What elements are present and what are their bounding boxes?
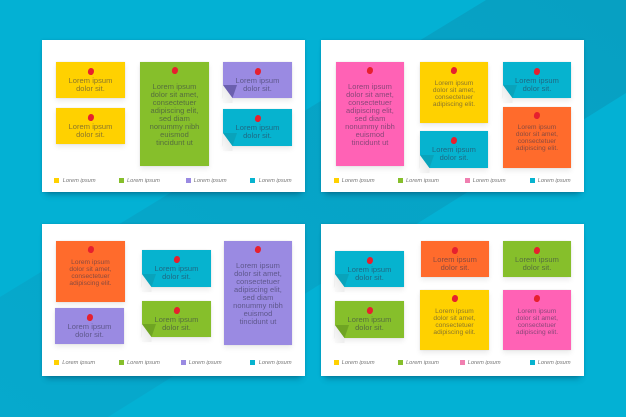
note: yellow lower: dolor sit. [76, 130, 105, 139]
note: orange [421, 241, 489, 277]
panel: top right board [321, 40, 584, 192]
note: cyan folded: dolor sit. [243, 131, 272, 140]
legend: Lorem ipsum [259, 178, 292, 184]
note: purple folded: dolor sit. [243, 84, 272, 93]
note: purple tall: adipiscing elit, [234, 285, 282, 294]
legend: Lorem ipsum [342, 360, 375, 366]
legend: Lorem ipsum [62, 360, 95, 366]
note: yellow [420, 62, 488, 123]
note: pink tall: dolor sit amet, [346, 90, 394, 99]
note: cyan folded upper: Lorem ipsum [515, 76, 559, 85]
note: green [503, 241, 571, 277]
note: green folded [335, 301, 404, 338]
note: yellow: consectetuer [435, 94, 473, 101]
note: purple folded [223, 62, 292, 98]
note: orange: Lorem ipsum [518, 124, 556, 131]
note: purple: Lorem ipsum [68, 322, 111, 331]
note: cyan folded: dolor sit. [355, 273, 384, 282]
note: cyan folded: Lorem ipsum [236, 123, 279, 132]
note: pink tall: Lorem ipsum [348, 82, 392, 91]
note: green tall [140, 62, 209, 166]
note: purple tall: dolor sit amet, [234, 269, 282, 278]
note: green tall: nonummy nibh [150, 122, 199, 131]
note: yellow: dolor sit amet, [433, 315, 476, 322]
note: orange: consectetuer [71, 273, 110, 280]
note: green tall: Lorem ipsum [153, 82, 196, 91]
note: purple: dolor sit. [75, 330, 104, 339]
panel: top left board [42, 40, 305, 192]
legend: Lorem ipsum [406, 360, 439, 366]
note: cyan folded lower [420, 131, 488, 168]
note: yellow: dolor sit amet, [433, 87, 475, 94]
legend: Lorem ipsum [127, 178, 160, 184]
note: orange: consectetuer [518, 138, 556, 145]
legend: Lorem ipsum [189, 360, 222, 366]
note: pink tall: tincidunt ut [352, 138, 388, 147]
note: green tall: dolor sit amet, [151, 90, 198, 99]
note: green: Lorem ipsum [515, 255, 559, 264]
note: yellow: Lorem ipsum [69, 76, 112, 85]
note: purple tall: consectetuer [236, 277, 280, 286]
legend: Lorem ipsum [473, 178, 506, 184]
note: green folded: Lorem ipsum [348, 315, 391, 324]
note: yellow: Lorem ipsum [435, 308, 474, 315]
note: yellow lower [56, 108, 125, 144]
note: yellow lower: Lorem ipsum [69, 122, 112, 131]
legend: Lorem ipsum [538, 360, 571, 366]
panel: bottom right board [321, 224, 584, 376]
note: green tall: consectetuer [153, 98, 196, 107]
legend [54, 360, 292, 366]
note: green folded: dolor sit. [355, 323, 384, 332]
note: pink: dolor sit amet, [516, 315, 558, 322]
note: green folded: dolor sit. [162, 323, 191, 332]
note: purple tall: Lorem ipsum [236, 261, 280, 270]
note: orange [503, 107, 571, 168]
note: pink [503, 290, 571, 350]
note: pink tall: nonummy nibh [345, 122, 395, 131]
note: green tall: tincidunt ut [156, 138, 193, 147]
note: cyan folded: Lorem ipsum [155, 264, 198, 273]
legend [334, 360, 571, 366]
note: yellow [420, 290, 489, 350]
note: yellow: dolor sit. [76, 84, 105, 93]
note: cyan folded upper: dolor sit. [523, 84, 551, 93]
note: pink tall: adipiscing elit, [346, 106, 394, 115]
note: purple tall: euismod [244, 309, 272, 318]
legend: Lorem ipsum [259, 360, 292, 366]
note: orange [56, 241, 125, 302]
note: cyan folded lower: dolor sit. [440, 153, 468, 162]
note: green tall: euismod [160, 130, 189, 139]
note: purple [55, 308, 124, 344]
note: orange: Lorem ipsum [433, 255, 477, 264]
note: pink tall: sed diam [355, 114, 385, 123]
legend: Lorem ipsum [538, 178, 571, 184]
note: green tall: sed diam [159, 114, 190, 123]
note: green folded: Lorem ipsum [155, 315, 198, 324]
note: cyan folded: dolor sit. [162, 272, 191, 281]
note: purple folded: Lorem ipsum [236, 76, 279, 85]
legend [54, 178, 292, 184]
note: cyan folded [142, 250, 211, 287]
legend: Lorem ipsum [63, 178, 96, 184]
legend [334, 178, 571, 184]
legend: Lorem ipsum [127, 360, 160, 366]
note: cyan folded upper [503, 62, 571, 98]
note: pink: consectetuer [518, 322, 556, 329]
note: purple tall: nonummy nibh [233, 301, 283, 310]
note: orange: adipiscing elit. [516, 145, 558, 152]
note: orange: dolor sit amet, [516, 131, 558, 138]
note: pink tall: consectetuer [348, 98, 392, 107]
note: green: dolor sit. [523, 263, 551, 272]
note: cyan folded [335, 251, 404, 287]
legend: Lorem ipsum [468, 360, 501, 366]
note: pink tall: euismod [356, 130, 384, 139]
panel: bottom left board [42, 224, 305, 376]
note: yellow: Lorem ipsum [435, 80, 473, 87]
note: cyan folded [223, 109, 292, 146]
note: cyan folded lower: Lorem ipsum [432, 145, 476, 154]
note: green tall: adipiscing elit, [151, 106, 198, 115]
note: orange: dolor sit. [441, 263, 469, 272]
note: orange: adipiscing elit. [69, 280, 112, 287]
note: pink: adipiscing elit. [516, 329, 558, 336]
note: purple tall [224, 241, 292, 345]
note: yellow: adipiscing elit. [433, 329, 476, 336]
note: purple tall: sed diam [243, 293, 273, 302]
note: green folded [142, 301, 211, 337]
note: pink: Lorem ipsum [518, 308, 556, 315]
note: yellow: consectetuer [435, 322, 474, 329]
note: purple tall: tincidunt ut [240, 317, 276, 326]
note: cyan folded: Lorem ipsum [348, 265, 391, 274]
note: orange: dolor sit amet, [69, 266, 112, 273]
note: yellow [56, 62, 125, 98]
legend: Lorem ipsum [342, 178, 375, 184]
legend: Lorem ipsum [406, 178, 439, 184]
note: pink tall [336, 62, 404, 166]
legend: Lorem ipsum [194, 178, 227, 184]
note: yellow: adipiscing elit. [433, 101, 475, 108]
note: orange: Lorem ipsum [71, 259, 110, 266]
